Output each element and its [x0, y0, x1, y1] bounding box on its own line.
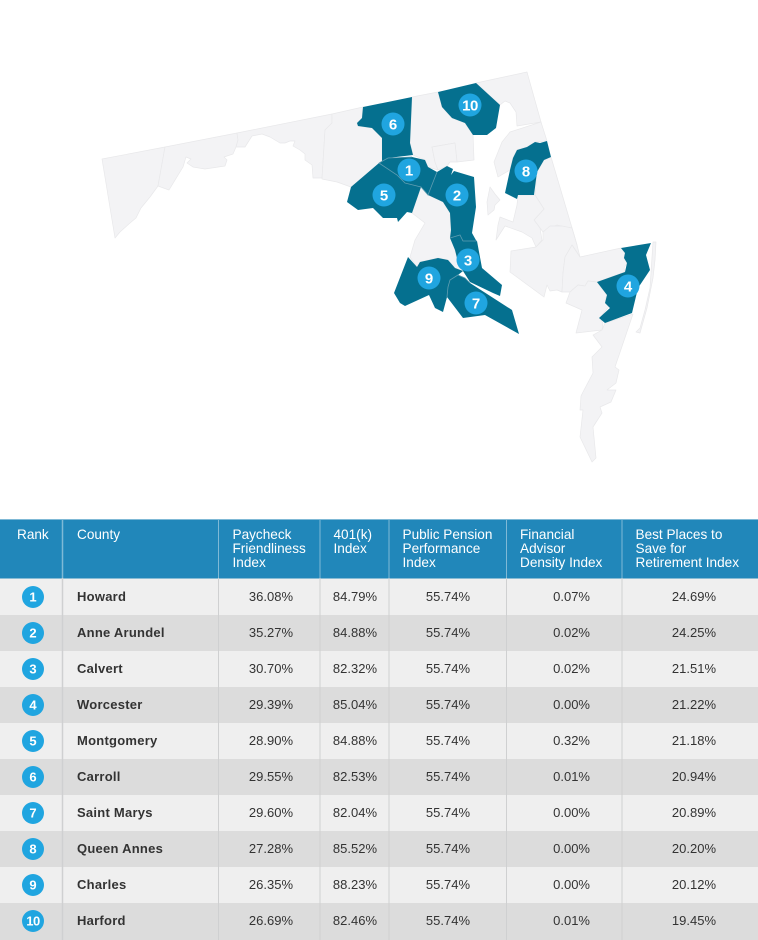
- row 4: Worcester: 21.22%: [672, 697, 716, 712]
- row 9: Charles: Charles: [77, 877, 126, 892]
- map of Maryland counties: [102, 72, 656, 462]
- row 8: Queen Annes: 27.28%: [249, 841, 293, 856]
- row 10: Harford: 26.69%: [249, 913, 293, 928]
- row 8: Queen Annes: Queen Annes: [77, 841, 163, 856]
- table header: [0, 519, 758, 578]
- header: Best Places to Save for Retirement Index: Retirement Index: [636, 555, 739, 570]
- western counties: [102, 107, 382, 238]
- header: Public Pension Performance Index: Public Pension: [402, 527, 492, 542]
- highlighted county: Harford: [438, 83, 500, 135]
- header: Paycheck Friendliness Index: Index: [232, 555, 266, 570]
- row 5: Montgomery: Montgomery: [77, 733, 158, 748]
- header: Paycheck Friendliness Index: Friendliness: [232, 541, 306, 556]
- row 4: Worcester: 85.04%: [333, 697, 377, 712]
- row backgrounds: [0, 578, 758, 940]
- row 10: Harford: 10: [26, 914, 40, 928]
- header: County: County: [77, 527, 120, 542]
- row 4: Worcester: 4: [29, 698, 37, 712]
- row 7: Saint Marys: 20.89%: [672, 805, 716, 820]
- row 2: Anne Arundel: 84.88%: [333, 625, 377, 640]
- header: Public Pension Performance Index: Performance: [402, 541, 480, 556]
- map marker 7: [464, 292, 488, 314]
- row 5: Montgomery: [22, 730, 716, 752]
- row 3: Calvert: 82.32%: [333, 661, 377, 676]
- row 1: Howard: Howard: [77, 589, 126, 604]
- header: Best Places to Save for Retirement Index: Best Places to: [636, 527, 722, 542]
- row 9: Charles: 0.00%: [553, 877, 590, 892]
- row 2: Anne Arundel: 35.27%: [249, 625, 293, 640]
- highlighted county: Anne Arundel: [428, 166, 477, 242]
- row 7: Saint Marys: [22, 802, 716, 824]
- row 3: Calvert: 30.70%: [249, 661, 293, 676]
- row 2: Anne Arundel: 24.25%: [672, 625, 716, 640]
- row 5: Montgomery: 0.32%: [553, 733, 590, 748]
- row 3: Calvert: 0.02%: [553, 661, 590, 676]
- row 4: Worcester: 55.74%: [426, 697, 470, 712]
- row 7: Saint Marys: 0.00%: [553, 805, 590, 820]
- row 8: Queen Annes: 8: [29, 842, 37, 856]
- row 4: Worcester: [22, 694, 716, 716]
- county borders between highlighted counties: [379, 157, 477, 297]
- row 9: Charles: 20.12%: [672, 877, 716, 892]
- row 8: Queen Annes: 20.20%: [672, 841, 716, 856]
- map marker 5: [372, 184, 396, 206]
- highlighted county: Queen Annes: [505, 141, 551, 199]
- row 1: Howard: 84.79%: [333, 589, 377, 604]
- row 7: Saint Marys: 82.04%: [333, 805, 377, 820]
- row 9: Charles: 26.35%: [249, 877, 293, 892]
- row 5: Montgomery: 28.90%: [249, 733, 293, 748]
- row 6: Carroll: 29.55%: [249, 769, 293, 784]
- header: Financial Advisor Density Index: Density Index: [520, 555, 603, 570]
- row 6: Carroll: 82.53%: [333, 769, 377, 784]
- highlighted county: Montgomery: [347, 163, 421, 222]
- map marker 3: 3: [464, 252, 472, 270]
- map marker 8: 8: [522, 164, 530, 180]
- map marker 4: 4: [624, 278, 633, 296]
- row 1: Howard: 1: [29, 590, 37, 604]
- row 7: Saint Marys: 55.74%: [426, 805, 470, 820]
- row 2: Anne Arundel: [22, 622, 716, 644]
- row 6: Carroll: 0.01%: [553, 769, 590, 784]
- row 8: Queen Annes: 55.74%: [426, 841, 470, 856]
- row 9: Charles: 9: [29, 878, 37, 892]
- header: Financial Advisor Density Index: Financial: [520, 527, 574, 542]
- header: 401(k) Index: Index: [334, 541, 367, 556]
- central and southern grey counties: [410, 92, 474, 271]
- row 9: Charles: 88.23%: [333, 877, 377, 892]
- row 4: Worcester: Worcester: [77, 697, 143, 712]
- highlighted county: Saint Marys: [447, 275, 519, 334]
- header: Best Places to Save for Retirement Index: Save for: [636, 541, 687, 556]
- map marker 9: [418, 266, 440, 290]
- map marker 8: [514, 160, 538, 182]
- row 6: Carroll: 55.74%: [426, 769, 470, 784]
- row 3: Calvert: 3: [29, 662, 37, 676]
- map marker 3: [456, 248, 480, 272]
- map marker 10: [458, 94, 482, 116]
- row 8: Queen Annes: [22, 838, 716, 860]
- highlighted county: Charles: [394, 257, 463, 312]
- row 8: Queen Annes: 0.00%: [553, 841, 590, 856]
- row 7: Saint Marys: Saint Marys: [77, 805, 153, 820]
- row 1: Howard: 36.08%: [249, 589, 293, 604]
- header: Public Pension Performance Index: Index: [402, 555, 436, 570]
- row 9: Charles: 55.74%: [426, 877, 470, 892]
- row 2: Anne Arundel: Anne Arundel: [77, 625, 165, 640]
- row 10: Harford: 19.45%: [672, 913, 716, 928]
- highlighted county: Calvert: [450, 235, 502, 296]
- map marker 9: 9: [425, 270, 433, 288]
- row 1: Howard: 0.07%: [553, 589, 590, 604]
- map marker 1: [398, 158, 420, 182]
- row 9: Charles: [22, 874, 716, 896]
- highlighted county: Carroll: [357, 97, 413, 162]
- header: 401(k) Index: 401(k): [334, 527, 372, 542]
- row 3: Calvert: 55.74%: [426, 661, 470, 676]
- row 3: Calvert: Calvert: [77, 661, 123, 676]
- row 6: Carroll: 6: [29, 770, 37, 784]
- row 3: Calvert: [22, 658, 716, 680]
- row 1: Howard: 55.74%: [426, 589, 470, 604]
- row 3: Calvert: 21.51%: [672, 661, 716, 676]
- row 1: Howard: 24.69%: [672, 589, 716, 604]
- header: Financial Advisor Density Index: Advisor: [520, 541, 566, 556]
- row 10: Harford: [22, 910, 716, 932]
- header: Paycheck Friendliness Index: Paycheck: [232, 527, 292, 542]
- row 5: Montgomery: 55.74%: [426, 733, 470, 748]
- highlighted county: Howard: [379, 157, 437, 195]
- row 5: Montgomery: 84.88%: [333, 733, 377, 748]
- row 5: Montgomery: 21.18%: [672, 733, 716, 748]
- ranking table: [0, 519, 758, 940]
- map marker 4: [616, 274, 640, 298]
- row 2: Anne Arundel: 0.02%: [553, 625, 590, 640]
- map marker 6: 6: [389, 116, 397, 134]
- row 6: Carroll: 20.94%: [672, 769, 716, 784]
- map marker 2: 2: [453, 188, 461, 204]
- map marker 7: 7: [472, 296, 480, 312]
- row 10: Harford: Harford: [77, 913, 126, 928]
- row 5: Montgomery: 5: [29, 734, 37, 748]
- row 10: Harford: 0.01%: [553, 913, 590, 928]
- row 6: Carroll: Carroll: [77, 769, 121, 784]
- row 8: Queen Annes: 85.52%: [333, 841, 377, 856]
- row 7: Saint Marys: 7: [29, 806, 37, 820]
- row 4: Worcester: 29.39%: [249, 697, 293, 712]
- row 2: Anne Arundel: 55.74%: [426, 625, 470, 640]
- row 10: Harford: 55.74%: [426, 913, 470, 928]
- row 4: Worcester: 0.00%: [553, 697, 590, 712]
- row 10: Harford: 82.46%: [333, 913, 377, 928]
- map marker 1: 1: [405, 162, 413, 180]
- highlighted county: Worcester: [597, 243, 651, 323]
- row 7: Saint Marys: 29.60%: [249, 805, 293, 820]
- map marker 2: [446, 184, 468, 206]
- row 1: Howard: [22, 586, 716, 608]
- row 2: Anne Arundel: 2: [29, 626, 37, 640]
- map marker 6: [382, 112, 404, 136]
- header: Rank: Rank: [17, 527, 49, 542]
- eastern shore grey counties: [476, 72, 656, 462]
- map marker 5: 5: [380, 188, 388, 204]
- map marker 10: 10: [462, 98, 478, 114]
- row 6: Carroll: [22, 766, 716, 788]
